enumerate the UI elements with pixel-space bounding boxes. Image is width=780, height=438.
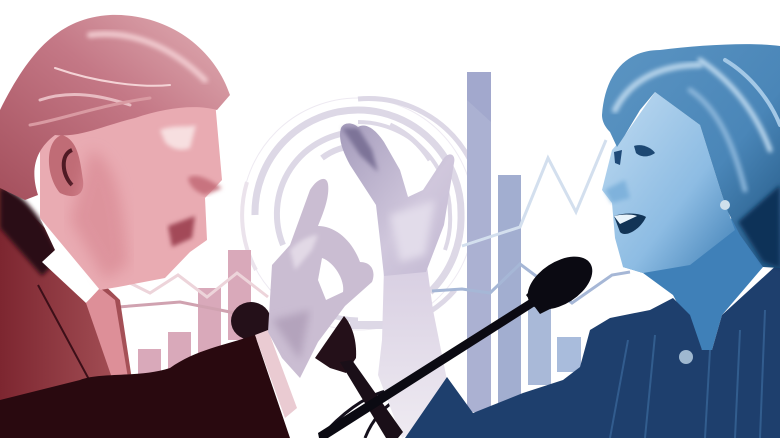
jacket — [0, 185, 135, 410]
right candidate's raised hand — [340, 123, 454, 438]
shirt collar — [40, 218, 102, 303]
eyes — [614, 150, 622, 165]
neck — [623, 215, 765, 350]
ear — [49, 135, 83, 196]
jacket brooch — [679, 350, 693, 364]
face shading — [70, 150, 128, 280]
concentric ring graphic — [242, 98, 474, 330]
right microphone — [318, 246, 602, 438]
left microphone — [231, 302, 403, 438]
shirt cuff — [255, 330, 297, 418]
lapel line — [38, 285, 92, 385]
hair highlights — [615, 60, 780, 190]
face and neck — [40, 100, 222, 290]
finger shadows — [342, 128, 378, 172]
left candidate — [0, 15, 297, 438]
mouth — [614, 213, 646, 234]
face — [602, 92, 735, 273]
ring gesture opening — [318, 258, 343, 300]
earring — [720, 200, 730, 210]
right bar chart — [467, 72, 581, 412]
right candidate — [405, 44, 780, 438]
nose shadow — [188, 176, 222, 195]
hair — [602, 44, 780, 268]
left candidate's hand — [268, 179, 374, 378]
dark hair shadow at neck — [738, 185, 780, 268]
nose shadow — [605, 180, 630, 203]
left bar chart — [138, 250, 251, 379]
microphone cables — [320, 390, 400, 438]
hair — [0, 15, 230, 200]
jacket — [405, 262, 780, 438]
tie — [86, 288, 128, 378]
sleeve — [0, 335, 290, 438]
mouth — [168, 216, 195, 247]
jacket shading — [610, 310, 765, 438]
forearm — [378, 266, 450, 438]
brow and eye — [160, 125, 196, 150]
collar shadow — [0, 188, 60, 276]
palm and fingers — [340, 123, 454, 276]
right line chart — [432, 140, 630, 303]
left line chart — [118, 273, 268, 313]
hair highlights — [30, 34, 205, 125]
